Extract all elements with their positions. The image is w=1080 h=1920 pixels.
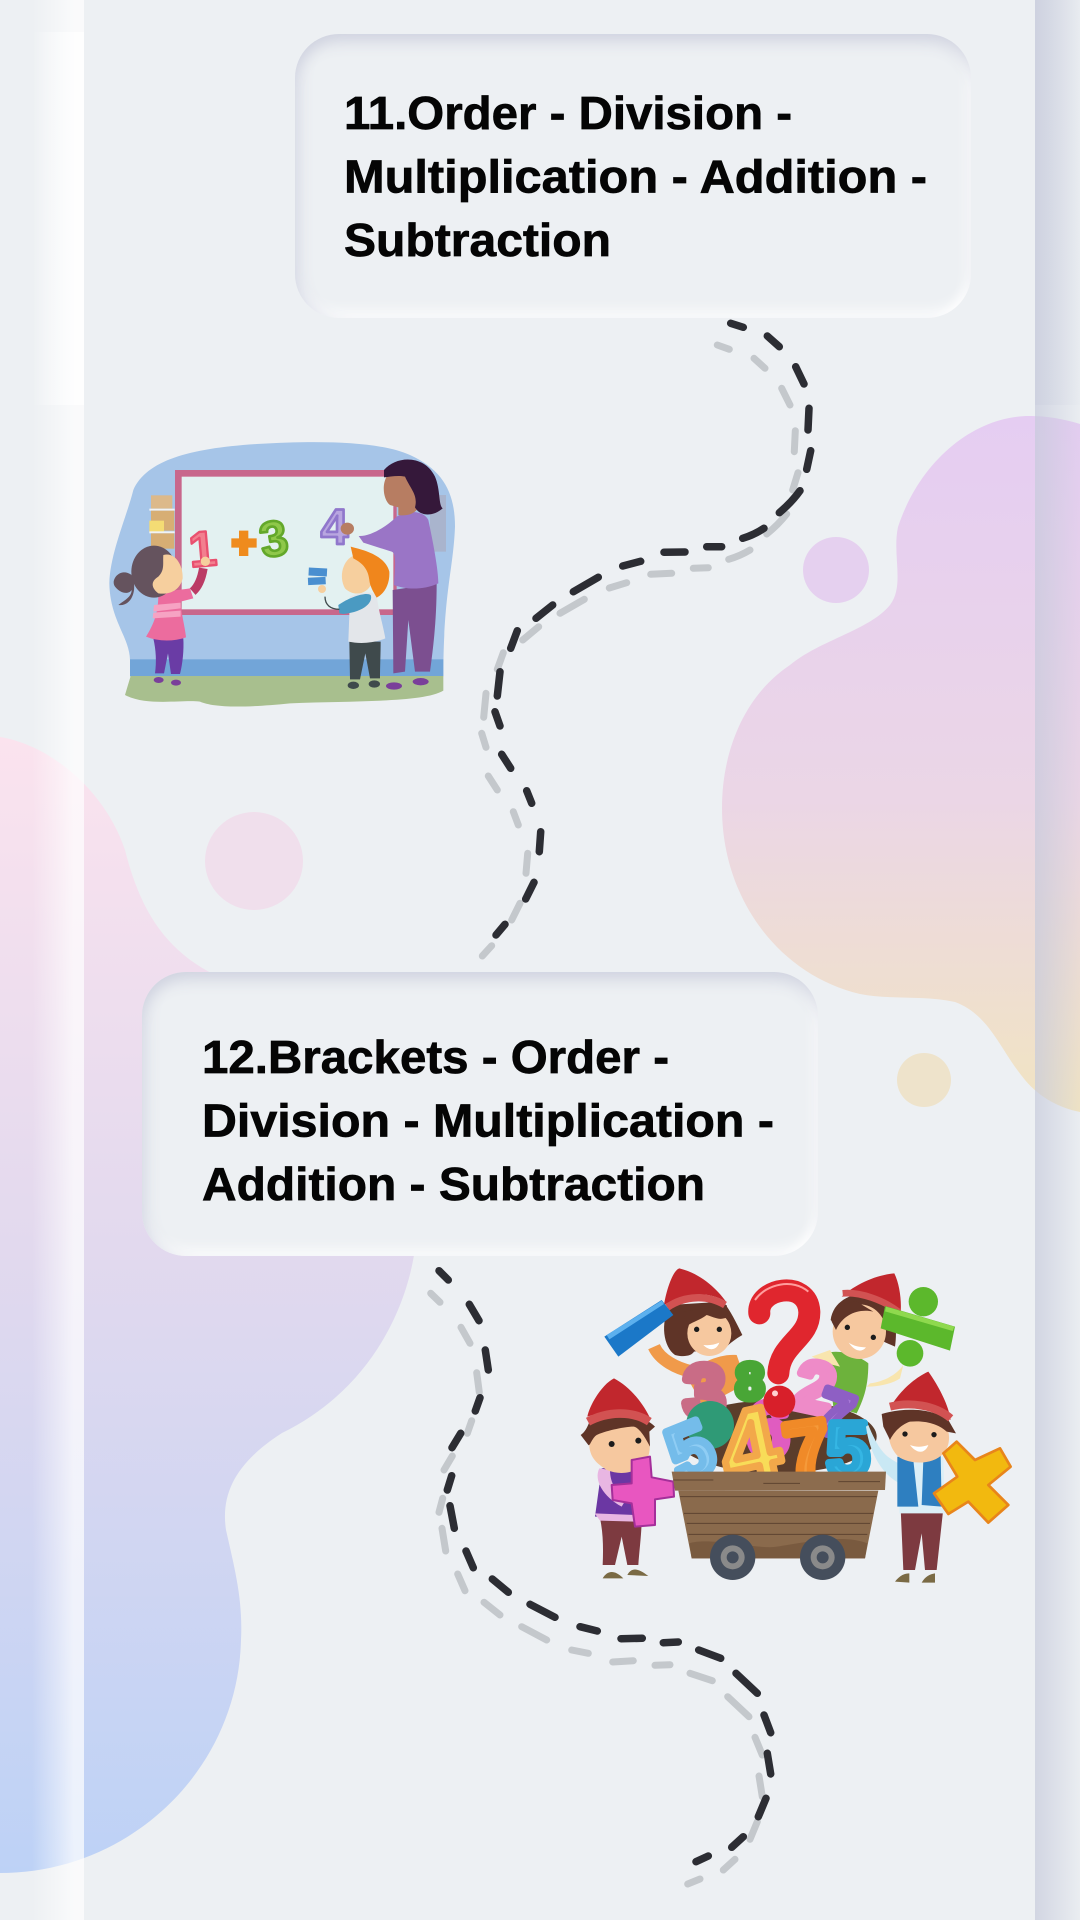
board frame: [175, 470, 397, 615]
floor: [125, 676, 443, 707]
card 11 text: 11.Order - Division -: [344, 87, 792, 139]
red question mark: [755, 1284, 809, 1418]
pile of numbers: 5: [655, 1404, 727, 1499]
blob: left pink to blue: [0, 737, 414, 1873]
board surface: [182, 477, 393, 609]
equals card: [308, 568, 327, 585]
illustration: kids with number cart: [581, 1268, 1011, 1583]
teacher: [341, 459, 443, 690]
yellow multiplication sign: [934, 1442, 1011, 1523]
pile of numbers: 4: [710, 1383, 790, 1508]
pile of numbers: [655, 1345, 877, 1508]
pile of numbers: 8: [736, 1353, 764, 1409]
plus sign: [231, 531, 257, 556]
illustration: classroom whiteboard: [109, 442, 455, 707]
wall backdrop: [109, 442, 455, 677]
circle: pink: [205, 812, 303, 910]
card 12 text: Division - Multiplication -: [202, 1094, 774, 1146]
card 12 text: [202, 1031, 774, 1210]
blob: right purple to tan: [722, 416, 1080, 1112]
pile of numbers: 5: [827, 1409, 869, 1494]
dashed path 2: grey: [431, 1293, 762, 1884]
pile of numbers: 7: [779, 1403, 835, 1497]
girl: [114, 546, 210, 686]
shelf: [149, 495, 175, 549]
right shaded strip: [1035, 0, 1080, 1920]
boy behind the cart: [812, 1273, 903, 1413]
card 11 text: [344, 87, 927, 266]
dashed path 1: dark: [495, 323, 811, 935]
blue minus sign: [604, 1300, 673, 1357]
pile of numbers: 6: [747, 1389, 789, 1474]
card 11: [295, 34, 971, 318]
wall stripe: [130, 659, 443, 676]
pile of numbers: 3: [684, 1351, 725, 1433]
right boy: [866, 1372, 956, 1583]
pink plus sign: [612, 1457, 674, 1527]
card 12 text: Addition - Subtraction: [202, 1158, 705, 1210]
card 12: [142, 972, 818, 1256]
card 12 text: 12.Brackets - Order -: [202, 1031, 669, 1083]
pile of numbers: 2: [788, 1345, 842, 1430]
circle: tan: [897, 1053, 951, 1107]
dashed path 2: dark: [439, 1271, 771, 1862]
number 3: 3: [255, 509, 292, 569]
pile of numbers: 7: [805, 1375, 862, 1453]
left boy: [581, 1378, 655, 1578]
cart wheels: [710, 1535, 845, 1580]
green division sign: [881, 1287, 955, 1367]
card 11 text: Multiplication - Addition -: [344, 150, 927, 202]
mine cart: [672, 1472, 886, 1558]
card 11 text: Subtraction: [344, 214, 611, 266]
dashed path 1: grey: [482, 345, 798, 956]
number 4: 4: [321, 499, 349, 555]
wall poster: [430, 495, 446, 552]
number 1: 1: [186, 520, 219, 578]
girl behind the cart: [654, 1268, 747, 1407]
boy: [318, 547, 389, 689]
circle: purple: [803, 537, 869, 603]
left light strip: [32, 0, 84, 1920]
